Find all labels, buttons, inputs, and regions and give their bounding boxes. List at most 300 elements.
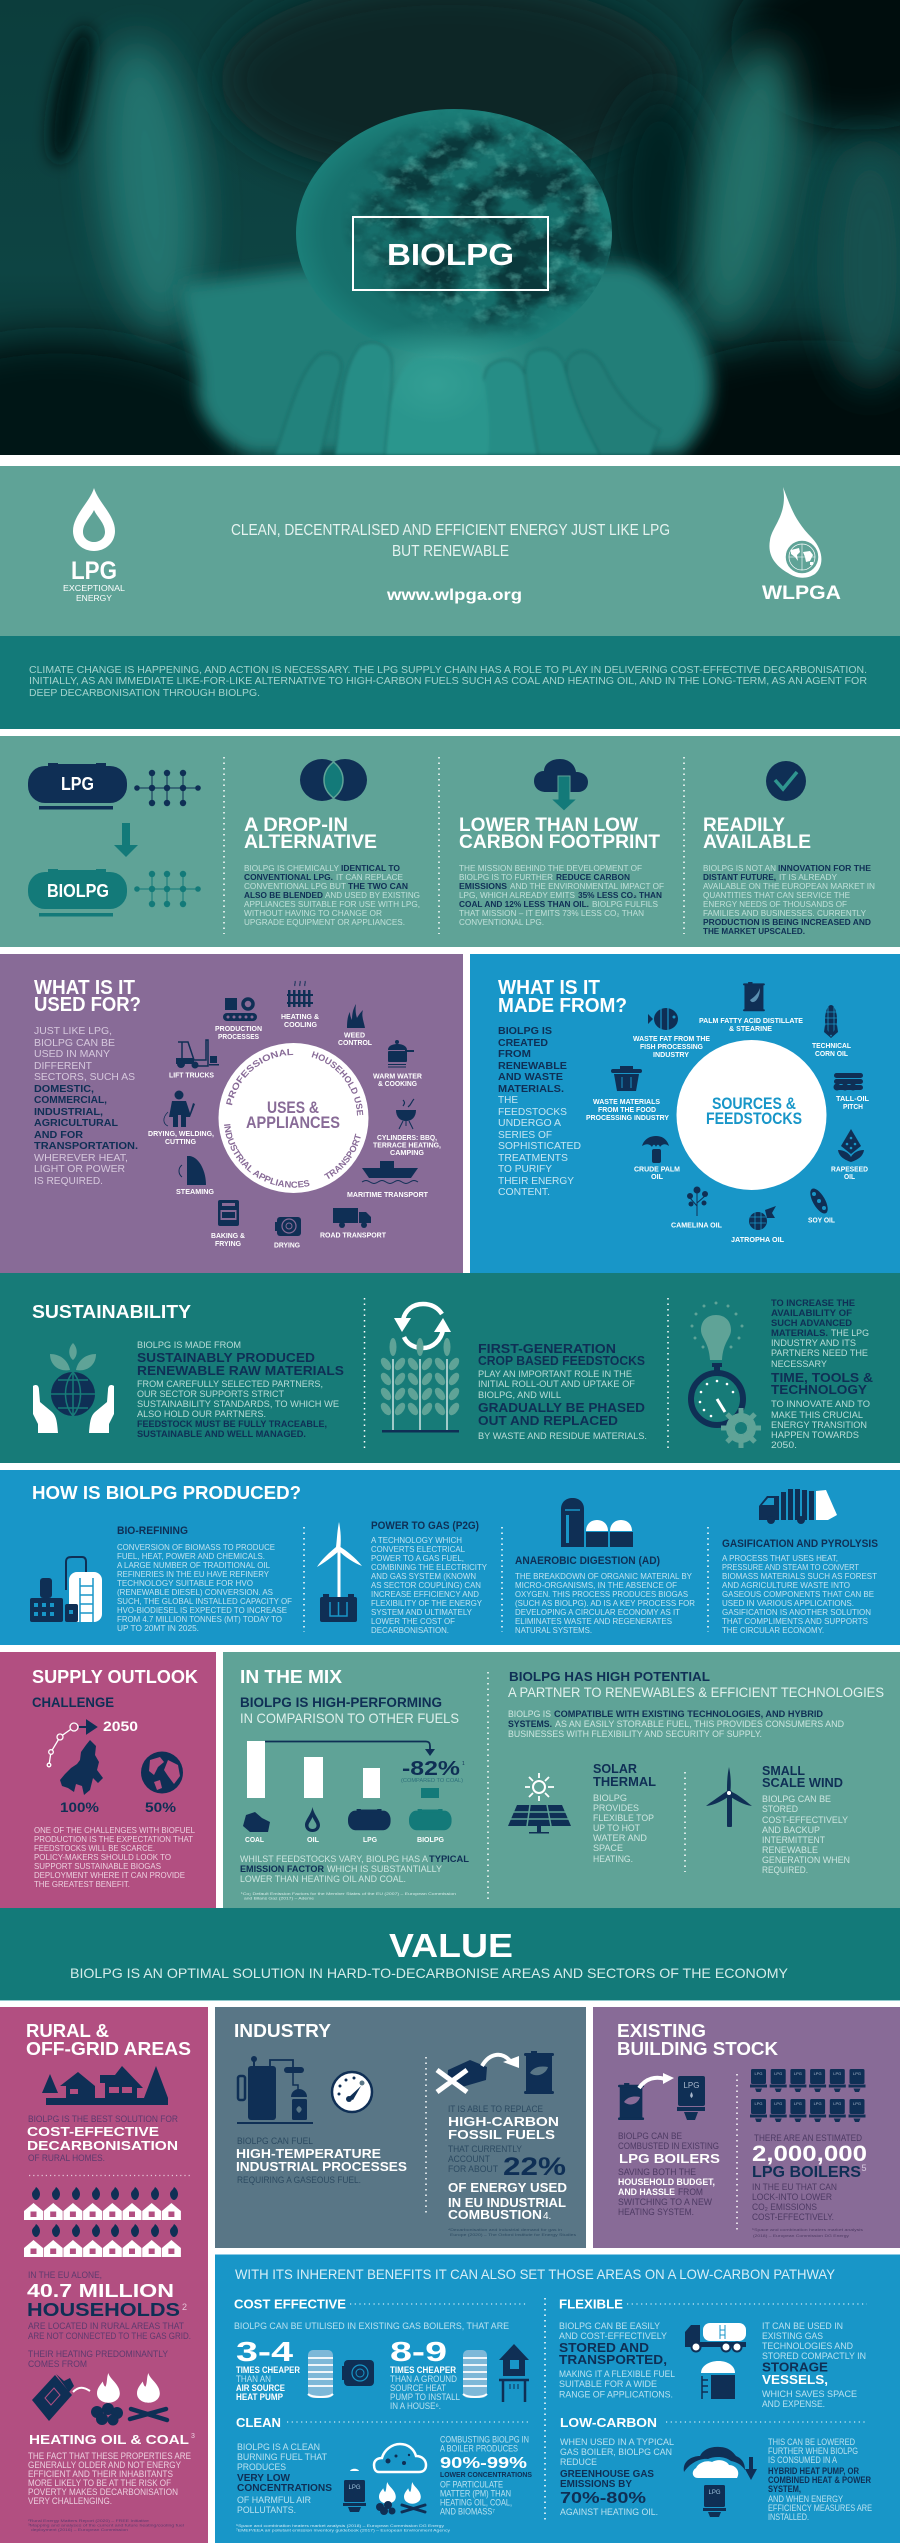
icon: cloud, down arrow and boiler: LPG	[708, 2490, 721, 2496]
icon: cylinders BBQ	[396, 1099, 416, 1129]
text: first-generation feedstocks: BIOLPG, AND WILL	[478, 1390, 561, 1401]
column: power to gas: POWER TO A GAS FUEL,	[371, 1553, 464, 1563]
bar chart: emissions comparison: -82%	[402, 1758, 460, 1780]
text: first-generation feedstocks: OUT AND REPLACED	[478, 1413, 618, 1428]
stat: 2,000,000 LPG boilers: 2,000,000	[752, 2141, 867, 2166]
stat: 90-99 percent: 90%-99%	[440, 2455, 527, 2472]
column: gasification and pyrolysis: GASIFICATION AND PYROLYSIS	[722, 1538, 878, 1550]
text: time tools technology: TECHNOLOGY	[771, 1382, 867, 1397]
icon: maritime transport	[362, 1161, 418, 1184]
column: solar thermal: HEATING.	[593, 1854, 633, 1865]
heading: VALUE	[389, 1927, 513, 1964]
stat: 40.7 million households: 2	[182, 2302, 187, 2312]
text	[703, 864, 875, 936]
column: bio-refining: FROM 4.7 MILLION TONNES (MT) TODAY TO	[117, 1614, 282, 1624]
text: SYSTEMS.	[508, 1719, 552, 1730]
text: WHICH SAVES SPACE	[762, 2389, 857, 2400]
icon: grid of LPG boilers: LPG	[833, 2101, 841, 2106]
text: EMISSIONS BY	[560, 2478, 632, 2490]
appliance icons and labels: WARM WATER	[373, 1074, 422, 1081]
text: PRODUCTION IS THE EXPECTATION THAT	[34, 1834, 193, 1844]
text: LPG boilers: SAVING BOTH THE	[618, 2167, 696, 2178]
icon: grid of LPG boilers: LPG	[814, 2071, 822, 2076]
text: STORED COMPACTLY IN	[762, 2351, 866, 2362]
stat: 2,000,000 LPG boilers: 5	[862, 2163, 867, 2173]
feedstock icons and labels	[586, 982, 870, 1244]
heading: LOWER THAN LOW	[459, 815, 638, 836]
appliance icons and labels: HEATING &	[281, 1014, 319, 1021]
icon: grid of LPG boilers: LPG	[853, 2101, 861, 2106]
section: flexible	[559, 2296, 867, 2410]
stats: 100%	[60, 1799, 100, 1815]
text: BIOLPG IS	[498, 1025, 552, 1037]
icon: heating and cooling	[287, 981, 313, 1007]
text: BURNING FUEL THAT	[237, 2452, 327, 2463]
text: high-carbon fossil fuels: 4.	[543, 2211, 551, 2222]
appliance icons and labels	[148, 981, 441, 1250]
text: UNDERGO A	[498, 1117, 561, 1129]
heading: IN THE MIX	[240, 1667, 342, 1687]
uses and appliances circle: INDUSTRIAL APPLIANCES	[224, 1124, 310, 1188]
heading: ALTERNATIVE	[244, 832, 377, 853]
text: time tools technology: MATERIALS.	[771, 1328, 828, 1339]
column: anaerobic digestion: (SUCH AS BIOLPG). AD IS A KEY PROCESS FOR	[515, 1598, 695, 1608]
icon: palm fatty acid distillate barrel	[743, 982, 765, 1011]
icon: grid of LPG boilers: LPG	[794, 2101, 802, 2106]
bar chart: emissions comparison: OIL	[307, 1837, 320, 1844]
text: high-carbon fossil fuels: 22%	[503, 2153, 566, 2181]
text: APPLIANCES SUITABLE FOR USE WITH LPG,	[244, 900, 420, 909]
stat: 90-99 percent: AND BIOMASS⁷	[440, 2506, 495, 2516]
column: small scale wind: BIOLPG CAN BE	[762, 1794, 831, 1805]
text: FEEDSTOCKS	[498, 1106, 567, 1118]
text: LPG boilers: HEATING SYSTEM.	[618, 2207, 694, 2218]
heading	[617, 2021, 778, 2059]
bar chart: emissions comparison: LPG	[363, 1837, 378, 1844]
text: WITHOUT HAVING TO CHANGE OR	[244, 909, 382, 918]
text: first-generation feedstocks	[478, 1341, 647, 1442]
column: bio-refining: BIO-REFINING	[117, 1525, 188, 1537]
column: power to gas: POWER TO GAS (P2G)	[371, 1520, 479, 1532]
section: cost effective	[234, 2296, 529, 2411]
text	[34, 1025, 138, 1187]
text: VESSELS,	[762, 2372, 828, 2387]
text: CONTENT.	[498, 1186, 550, 1198]
logo: LPG exceptional energy	[63, 488, 125, 603]
text: WHILST FEEDSTOCKS VARY, BIOLPG HAS A	[240, 1854, 429, 1865]
text: DIFFERENT	[34, 1060, 93, 1072]
column: small scale wind: SMALL	[762, 1763, 805, 1778]
panel: supply outlook	[0, 1652, 216, 1908]
feedstock icons and labels: INDUSTRY	[653, 1052, 689, 1059]
feedstock icons and labels: PITCH	[843, 1104, 863, 1111]
text: IT CAN BE USED IN	[762, 2321, 843, 2332]
text	[560, 2437, 674, 2518]
panel: what is it used for	[0, 954, 463, 1273]
text: LPG boilers: LPG BOILERS	[619, 2151, 720, 2166]
appliance icons and labels: CONTROL	[338, 1040, 373, 1047]
column: power to gas: INCREASE EFFICIENCY AND	[371, 1589, 479, 1599]
text: BIOLPG FULFILS	[592, 900, 658, 909]
subtitle: BIOLPG IS AN OPTIMAL SOLUTION IN HARD-TO-DECARBONISE AREAS AND SECTORS OF THE ECONOMY	[70, 1965, 789, 1981]
logo: LPG exceptional energy: ENERGY	[76, 593, 112, 603]
text: AND FOR	[34, 1129, 83, 1141]
stat: 8-9 times cheaper	[390, 2336, 460, 2411]
stat: 2,000,000 LPG boilers: COST-EFFECTIVELY.	[752, 2212, 834, 2223]
icon: grid of off-grid houses	[24, 2187, 181, 2257]
text	[237, 2442, 332, 2516]
text: time tools technology: INDUSTRY AND ITS	[771, 1338, 856, 1349]
text: high-carbon fossil fuels: FOSSIL FUELS	[448, 2127, 555, 2142]
text: high-carbon fossil fuels: COMBUSTION	[448, 2208, 542, 2222]
text: TRANSPORTED,	[559, 2352, 667, 2367]
text: COMPATIBLE WITH EXISTING TECHNOLOGIES, AND HYBRID	[554, 1709, 823, 1720]
panel: intro band	[0, 466, 900, 636]
appliance icons and labels: ROAD TRANSPORT	[320, 1232, 387, 1240]
text: ONE OF THE CHALLENGES WITH BIOFUEL	[34, 1825, 195, 1835]
icon: soy oil	[807, 1186, 831, 1216]
text: raw materials: FROM CAREFULLY SELECTED PARTNERS,	[137, 1379, 323, 1390]
stat: 40.7 million households: ARE NOT CONNECTED TO THE GAS GRID.	[28, 2331, 191, 2342]
icon: recycle arrows	[394, 1304, 451, 1348]
icon: bulb, stopwatch and gear	[690, 1302, 761, 1448]
column: anaerobic digestion: NATURAL SYSTEMS.	[515, 1625, 592, 1635]
icon: coal	[243, 1812, 270, 1832]
text: time tools technology: TO INCREASE THE	[771, 1298, 855, 1309]
column: anaerobic digestion: MICRO-ORGANISMS, IN THE ABSENCE OF	[515, 1580, 677, 1590]
text	[768, 2437, 872, 2522]
text: heating oil and coal: 3	[191, 2433, 195, 2440]
feedstock icons and labels: SOY OIL	[808, 1218, 836, 1224]
text: WHEREVER HEAT,	[34, 1152, 128, 1164]
tagline: BUT RENEWABLE	[392, 543, 509, 560]
icon: boiler, cloud and flames	[343, 2444, 426, 2515]
text: time tools technology: MAKE THIS CRUCIAL	[771, 1410, 863, 1421]
text: AND WASTE	[498, 1071, 563, 1083]
appliance icons and labels: COOLING	[284, 1022, 318, 1029]
panel: sustainability	[0, 1273, 900, 1463]
text: AND EXPENSE.	[762, 2399, 825, 2410]
stat: 8-9 times cheaper: IN A HOUSE⁶.	[390, 2401, 441, 2411]
appliance icons and labels: FRYING	[215, 1241, 242, 1248]
text: AGRICULTURAL	[34, 1117, 119, 1129]
logo: LPG exceptional energy: EXCEPTIONAL	[63, 583, 125, 593]
text: FAMILIES AND BUSINESSES. CURRENTLY	[703, 909, 867, 918]
stat: 3-4 times cheaper	[236, 2336, 300, 2402]
text: raw materials	[137, 1340, 344, 1440]
logo: LPG exceptional energy: LPG	[71, 557, 117, 585]
uses and appliances circle: USES &	[267, 1098, 319, 1117]
column: anaerobic digestion: ANAEROBIC DIGESTION (AD)	[515, 1555, 660, 1567]
panel: how is biolpg produced	[0, 1470, 900, 1645]
stat: 90-99 percent: HEATING OIL, COAL,	[440, 2498, 512, 2508]
text: IS REQUIRED.	[34, 1175, 103, 1187]
text	[244, 864, 420, 927]
website: www.wlpga.org	[386, 587, 522, 604]
text: raw materials: RENEWABLE RAW MATERIALS	[137, 1363, 344, 1378]
text: LPG boilers: SWITCHING TO A NEW	[618, 2197, 712, 2208]
text: TREATMENTS	[498, 1152, 568, 1164]
subheading: CHALLENGE	[32, 1694, 114, 1710]
panel: climate statement	[0, 636, 900, 729]
icon: grid of LPG boilers: LPG	[814, 2101, 822, 2106]
text: DEPLOYMENT WHERE IT CAN PROVIDE	[34, 1870, 185, 1880]
heading: SUSTAINABILITY	[32, 1302, 191, 1322]
stat: 2,000,000 LPG boilers	[752, 2133, 867, 2223]
heading: EXISTING	[617, 2021, 706, 2041]
footnote: ⁵Space and combination heaters market analysis	[752, 2227, 863, 2232]
title box: BIOLPG	[387, 237, 514, 272]
uses and appliances circle	[218, 1043, 368, 1193]
footnote	[448, 2227, 576, 2237]
text: LPG boilers: COMBUSTED IN EXISTING	[618, 2141, 719, 2152]
footnotes: ²Rural Energy Matters Report (2020) – FREE Initiative	[28, 2518, 150, 2523]
text: heating oil and coal: MORE LIKELY TO BE AT THE RISK OF	[28, 2478, 171, 2489]
text: heating oil and coal: GENERALLY OLDER AND NOT ENERGY	[28, 2460, 182, 2471]
text: THAT MISSION – IT EMITS 73% LESS CO₂ THAN	[459, 909, 644, 918]
text: high-carbon fossil fuels: ACCOUNT	[448, 2154, 490, 2165]
feedstock icons and labels: JATROPHA OIL	[731, 1237, 785, 1244]
text: VERY LOW	[237, 2472, 290, 2484]
panel: rural and off-grid areas	[0, 2007, 208, 2543]
text	[498, 1025, 581, 1198]
text: high-carbon fossil fuels: FOR ABOUT	[448, 2164, 498, 2175]
text: time tools technology: 2050.	[771, 1440, 797, 1451]
column: bio-refining: REFINERIES IN THE EU HAVE REFINERY	[117, 1569, 269, 1579]
text: AND COST-EFFECTIVELY	[559, 2331, 668, 2342]
icon: grid of LPG boilers: LPG	[754, 2101, 763, 2106]
appliance icons and labels: LIFT TRUCKS	[169, 1072, 214, 1080]
heading: BUILDING STOCK	[617, 2039, 778, 2059]
text: THIS CAN BE LOWERED	[768, 2437, 855, 2447]
column: anaerobic digestion: OXYGEN. THIS PROCESS PRODUCES BIOGAS	[515, 1589, 688, 1599]
icon: storage vessel	[701, 2361, 735, 2399]
stats	[60, 1799, 177, 1815]
feedstock icons and labels: PROCESSING INDUSTRY	[586, 1115, 669, 1122]
section: cost effective: BIOLPG CAN BE UTILISED IN EXISTING GAS BOILERS, THAT ARE	[234, 2321, 509, 2332]
heading: CARBON FOOTPRINT	[459, 832, 660, 853]
text	[240, 1854, 469, 1885]
stat: 40.7 million households: COMES FROM	[28, 2359, 87, 2370]
stats: 50%	[145, 1799, 177, 1815]
panel: key properties	[0, 736, 900, 947]
stat: 3-4 times cheaper: AIR SOURCE	[236, 2383, 285, 2393]
feedstock icons and labels: OIL	[844, 1174, 856, 1181]
icon: production processes	[223, 998, 257, 1021]
stat: 90-99 percent	[440, 2434, 532, 2516]
text: CONVENTIONAL LPG.	[459, 918, 544, 927]
icon: heating oil and coal	[32, 2373, 167, 2426]
icon: grid of LPG boilers: LPG	[774, 2101, 782, 2106]
column: power to gas: CONVERTS ELECTRICAL	[371, 1544, 465, 1554]
heading: A DROP-IN	[244, 815, 348, 836]
column: power to gas: A TECHNOLOGY WHICH	[371, 1535, 462, 1545]
stat: 90-99 percent: MATTER (PM) THAN	[440, 2488, 511, 2498]
icon: warm water and cooking	[388, 1040, 414, 1068]
panel: existing building stock	[593, 2007, 900, 2248]
text: AVAILABLE ON THE EUROPEAN MARKET IN	[703, 882, 875, 891]
subheading: IN COMPARISON TO OTHER FUELS	[240, 1710, 459, 1726]
section: clean	[236, 2415, 532, 2532]
text: high-carbon fossil fuels: IN EU INDUSTRIAL	[448, 2196, 566, 2210]
bar chart: emissions comparison: (COMPARED TO COAL)	[401, 1778, 463, 1784]
heading	[459, 815, 660, 853]
text: first-generation feedstocks: GRADUALLY BE PHASED	[478, 1400, 645, 1415]
heading	[244, 815, 377, 853]
icon: replace coal with barrel	[437, 2051, 554, 2094]
text: AS AN EASILY STORABLE FUEL, THIS PROVIDES CONSUMERS AND	[555, 1719, 844, 1730]
text: 70%-80%	[560, 2490, 646, 2507]
text: first-generation feedstocks: INITIAL ROLL-OUT AND UPTAKE OF	[478, 1379, 635, 1390]
column: gasification and pyrolysis: GASEOUS COMPONENTS THAT CAN BE	[722, 1589, 874, 1599]
icon: fish waste	[648, 1008, 678, 1030]
text: high-temperature processes: INDUSTRIAL PROCESSES	[236, 2159, 407, 2174]
icon: digester silo and domes	[561, 1498, 633, 1547]
column: small scale wind: COST-EFFECTIVELY	[762, 1815, 849, 1826]
icon: barrel to boiler: LPG	[683, 2081, 700, 2090]
text: EMISSION FACTOR	[240, 1864, 324, 1875]
text: BIOLPG IS CHEMICALLY	[244, 864, 340, 873]
text: time tools technology: NECESSARY	[771, 1359, 828, 1370]
text: EMISSIONS	[459, 882, 508, 891]
stat: 40.7 million households: THEIR HEATING PREDOMINANTLY	[28, 2349, 169, 2360]
text: STORAGE	[762, 2360, 828, 2374]
text: high-carbon fossil fuels: HIGH-CARBON	[448, 2114, 559, 2129]
text: high-carbon fossil fuels: OF ENERGY USED	[448, 2181, 567, 2195]
column: drop-in alternative	[244, 759, 420, 927]
column: small scale wind: RENEWABLE	[762, 1845, 818, 1856]
column: gasification and pyrolysis: BIOMASS MATERIALS SUCH AS FOREST	[722, 1571, 877, 1581]
text: SERIES OF	[498, 1129, 552, 1141]
icon: jatropha oil	[749, 1206, 776, 1230]
icon: rapeseed oil	[838, 1129, 864, 1162]
icon: steaming	[179, 1156, 206, 1185]
column: solar thermal: PROVIDES	[593, 1803, 639, 1814]
text: time tools technology: SUCH ADVANCED	[771, 1318, 852, 1329]
appliance icons and labels: CYLINDERS: BBQ,	[377, 1135, 437, 1142]
text: GAS BOILER, BIOLPG CAN	[560, 2447, 672, 2458]
text: USED IN MANY	[34, 1048, 110, 1060]
column: solar thermal: THERMAL	[593, 1774, 656, 1789]
column: bio-refining: CONVERSION OF BIOMASS TO PRODUCE	[117, 1542, 275, 1552]
icon: coin stack and heat pump	[308, 2350, 374, 2398]
icon: houses and trees	[42, 2066, 168, 2105]
icon: barrel to boiler	[618, 2073, 705, 2120]
heading: INDUSTRY	[234, 2021, 331, 2041]
text: CREATED	[498, 1037, 548, 1049]
appliance icons and labels: STEAMING	[176, 1189, 215, 1196]
column: small scale wind	[762, 1763, 850, 1876]
text: CONCENTRATIONS	[237, 2482, 332, 2494]
column: solar thermal: SPACE	[593, 1843, 623, 1854]
stat: 90-99 percent: LOWER CONCENTRATIONS	[440, 2472, 532, 2479]
text: LIGHT OR POWER	[34, 1163, 125, 1175]
feedstock icons and labels: RAPESEED	[831, 1166, 868, 1174]
stat: 2,000,000 LPG boilers: LOCK-INTO LOWER	[752, 2192, 832, 2203]
text: BIOLPG CAN BE EASILY	[559, 2321, 661, 2332]
text: first-generation feedstocks: PLAY AN IMPORTANT ROLE IN THE	[478, 1369, 632, 1380]
icon: cloud with arrow	[534, 759, 588, 811]
feedstock icons and labels: PALM FATTY ACID DISTILLATE	[699, 1018, 803, 1025]
column: small scale wind: AND BACKUP	[762, 1825, 820, 1836]
icon: check mark	[766, 761, 806, 801]
text: LPG boilers: FROM	[678, 2187, 703, 2198]
text: time tools technology: PARTNERS NEED THE	[771, 1348, 868, 1359]
text: TRANSPORTATION.	[34, 1140, 138, 1152]
icon: solar panel and sun	[508, 1773, 571, 1834]
column: bio-refining: UP TO 20MT IN 2025.	[117, 1623, 199, 1633]
text: raw materials: SUSTAINABLY PRODUCED	[137, 1350, 315, 1365]
text: COAL AND 12% LESS THAN OIL.	[459, 900, 589, 909]
text: JUST LIKE LPG,	[34, 1025, 112, 1037]
text: heating oil and coal: EFFICIENT AND THEIR INHABITANTS	[28, 2469, 173, 2480]
stat: 90-99 percent: COMBUSTING BIOLPG IN	[440, 2434, 529, 2444]
icon: grid of LPG boilers: LPG	[794, 2071, 802, 2076]
column: gasification and pyrolysis: THE CIRCULAR ECONOMY.	[722, 1625, 824, 1635]
heading: RURAL &	[26, 2021, 109, 2041]
text: raw materials: OUR SECTOR SUPPORTS STRICT	[137, 1389, 284, 1400]
heading: USED FOR?	[34, 994, 141, 1016]
footnote: Europe (2020) – The Oxford Institute for Energy Studies	[450, 2232, 576, 2237]
column: solar thermal: BIOLPG	[593, 1793, 627, 1804]
column: solar thermal: UP TO HOT	[593, 1823, 640, 1834]
footnote: (2018) – European Commission DG Energy	[753, 2233, 849, 2238]
text: RENEWABLE	[498, 1060, 567, 1072]
text: high-temperature processes: BIOLPG CAN FUEL	[237, 2136, 313, 2147]
text: LPG boilers: BIOLPG CAN BE	[618, 2131, 682, 2142]
panel: climate statement: CLIMATE CHANGE IS HAPPENING, AND ACTION IS NECESSARY. THE LPG SUPPLY CHAIN HAS A ROLE TO PLAY IN DELIVERING COST-EFFECTIVE DECARBONISATION.	[29, 665, 867, 676]
icon: grid of LPG boilers: LPG	[853, 2071, 861, 2076]
stat: 40.7 million households: HOUSEHOLDS	[27, 2300, 180, 2320]
text: THE GREATEST BENEFIT.	[34, 1879, 130, 1889]
text: SUPPORT SUSTAINABLE BIOGAS	[34, 1861, 161, 1871]
text: POLLUTANTS.	[237, 2505, 296, 2516]
text: ENERGY NEEDS OF THOUSANDS OF	[703, 900, 847, 909]
text: time tools technology: HAPPEN TOWARDS	[771, 1430, 859, 1441]
panel: value banner	[0, 1908, 900, 2000]
appliance icons and labels: MARITIME TRANSPORT	[347, 1192, 429, 1199]
column: anaerobic digestion: THE BREAKDOWN OF ORGANIC MATERIAL BY	[515, 1571, 692, 1581]
icon: bioLPG tank	[409, 1809, 452, 1830]
column: anaerobic digestion	[515, 1555, 695, 1635]
icon: overlapping circles	[300, 759, 367, 801]
heading	[703, 815, 811, 853]
text: heating oil and coal: VERY CHALLENGING.	[28, 2496, 112, 2507]
stat: 3-4 times cheaper: THAN AN	[236, 2374, 271, 2384]
text: GREENHOUSE GAS	[560, 2468, 654, 2480]
column: small scale wind: REQUIRED.	[762, 1865, 808, 1876]
text: 35% LESS CO₂ THAN	[578, 891, 662, 900]
appliance icons and labels: PRODUCTION	[215, 1026, 262, 1033]
icon: grid of LPG boilers: LPG	[754, 2071, 763, 2076]
text: LOWER THAN HEATING OIL AND COAL.	[240, 1874, 406, 1885]
text: time tools technology: TO INNOVATE AND TO	[771, 1399, 870, 1410]
column: gasification and pyrolysis: AND AGRICULTURE WASTE INTO	[722, 1580, 850, 1590]
column: small scale wind: SCALE WIND	[762, 1775, 843, 1790]
text: LPG, WHICH ALREADY EMITS	[459, 891, 575, 900]
column: gasification and pyrolysis: USED IN VARIOUS APPLICATIONS.	[722, 1598, 854, 1608]
icon: wind turbine with battery	[317, 1522, 362, 1622]
stat: 90-99 percent: A BOILER PRODUCES	[440, 2444, 518, 2454]
icon: waste bin	[611, 1066, 642, 1091]
column: gasification and pyrolysis: GASIFICATION IS ANOTHER SOLUTION	[722, 1607, 871, 1617]
text: high-carbon fossil fuels: THAT CURRENTLY	[448, 2144, 523, 2155]
icon: lift trucks	[176, 1040, 219, 1068]
logo: WLPGA: WLPGA	[762, 583, 841, 604]
feedstock icons and labels: CORN OIL	[815, 1051, 849, 1058]
column: bio-refining: TECHNOLOGY SUITABLE FOR HVO	[117, 1578, 253, 1588]
text: TYPICAL	[429, 1854, 469, 1865]
